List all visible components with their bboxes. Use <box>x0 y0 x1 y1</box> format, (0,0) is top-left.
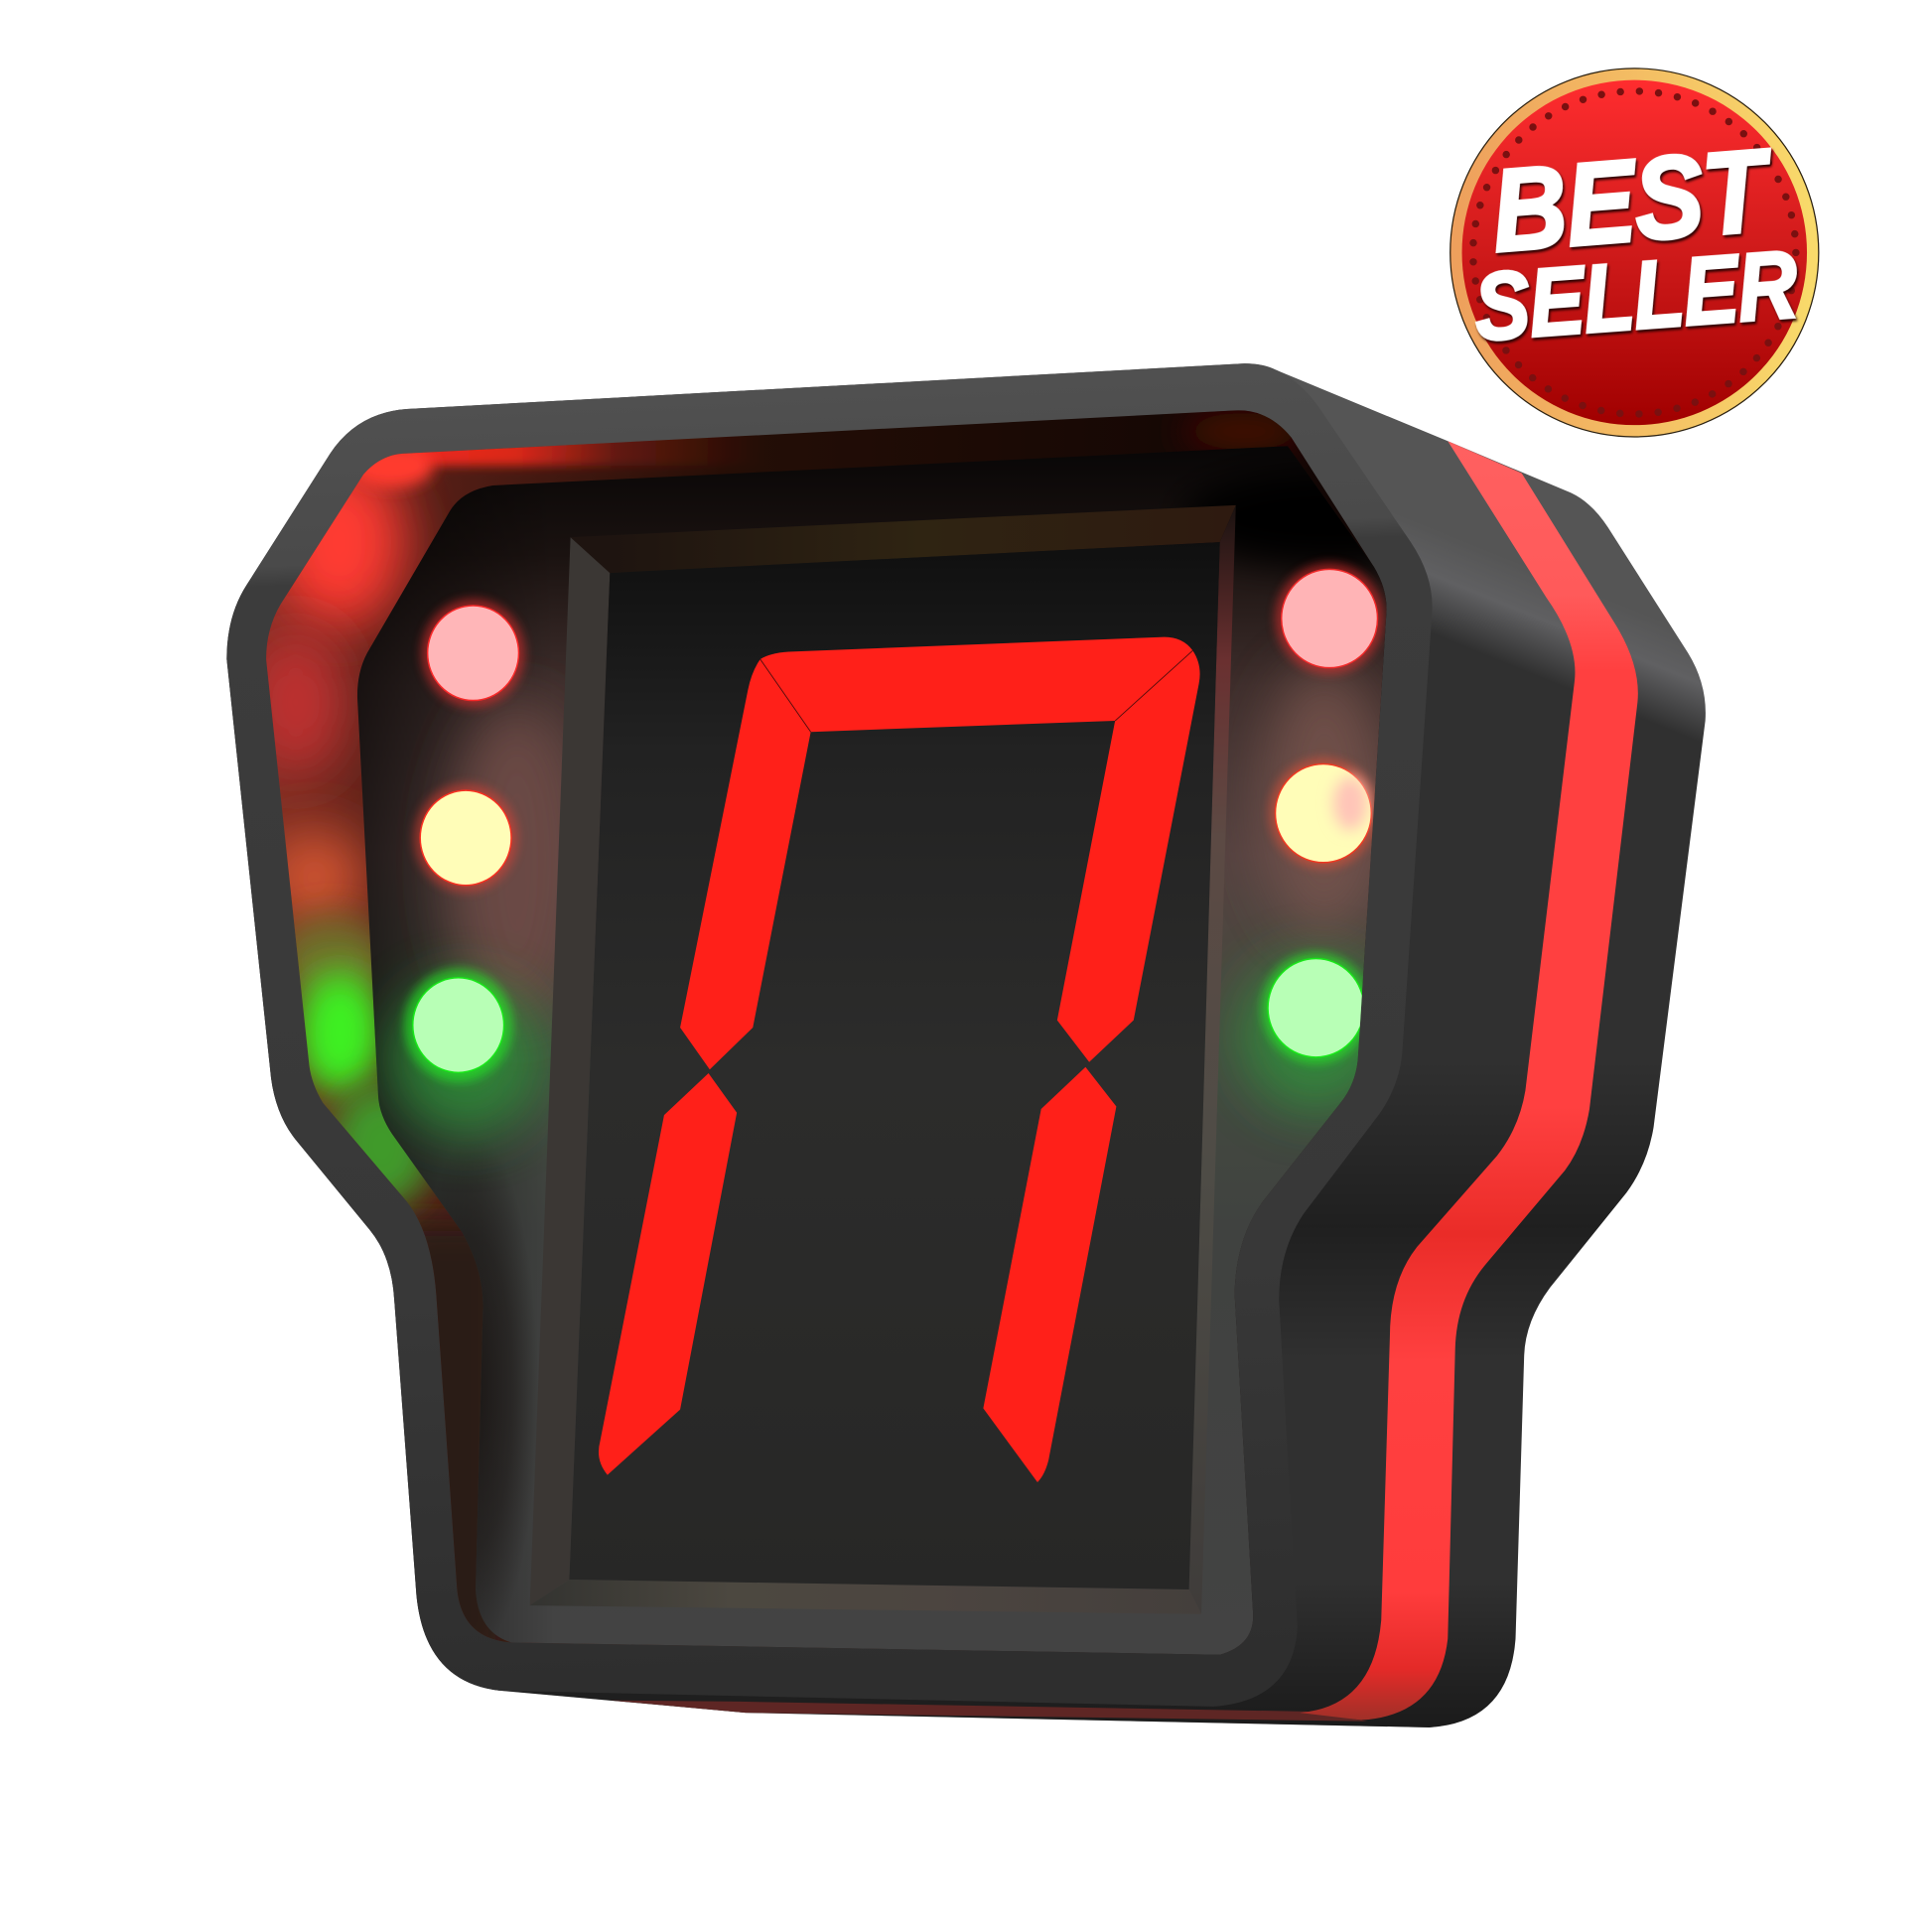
body silhouette <box>226 363 1706 1727</box>
device body side with red stripe <box>226 363 1706 1727</box>
lower right segment <box>983 1067 1116 1482</box>
red stripe <box>1300 441 1638 1721</box>
top segment <box>760 637 1192 732</box>
product illustration <box>226 68 1819 1727</box>
screen <box>569 542 1220 1589</box>
lower left shadow <box>453 1186 528 1598</box>
frame right bevel <box>1189 505 1236 1614</box>
body shading <box>226 363 1706 1727</box>
display frame and screen <box>530 505 1236 1614</box>
best seller badge <box>1450 69 1819 437</box>
LED: right green <box>1262 952 1370 1063</box>
face glow <box>389 469 1478 1136</box>
lower left segment <box>599 1073 737 1475</box>
upper left segment <box>680 659 811 1069</box>
LED: left yellow <box>414 783 517 893</box>
badge text: SELLER: SELLER <box>1471 231 1801 360</box>
frame bottom bevel <box>530 1580 1201 1614</box>
frame top bevel <box>571 505 1236 573</box>
frame left bevel <box>530 537 610 1605</box>
LED: right red <box>1276 563 1384 674</box>
wall base <box>246 394 1405 1663</box>
LED: left red <box>421 599 525 707</box>
badge red disc <box>1462 80 1807 425</box>
badge dotted border <box>1473 91 1796 414</box>
upper right segment <box>1057 650 1200 1062</box>
recess inner wall with coloured glow <box>246 394 1405 1663</box>
wall glow: red and green <box>246 413 1307 1663</box>
seven-segment digit 7 style display <box>599 637 1200 1482</box>
face base <box>345 431 1405 1663</box>
lower edge red sliver <box>610 1701 1368 1722</box>
LED: left green <box>404 968 512 1082</box>
badge gold ring <box>1450 69 1819 437</box>
badge text: BEST: BEST <box>1487 124 1778 276</box>
recessed face panel <box>357 447 1386 1654</box>
LED: right yellow <box>1269 758 1378 869</box>
left shadow <box>357 510 516 1642</box>
front bezel ring <box>226 363 1433 1707</box>
